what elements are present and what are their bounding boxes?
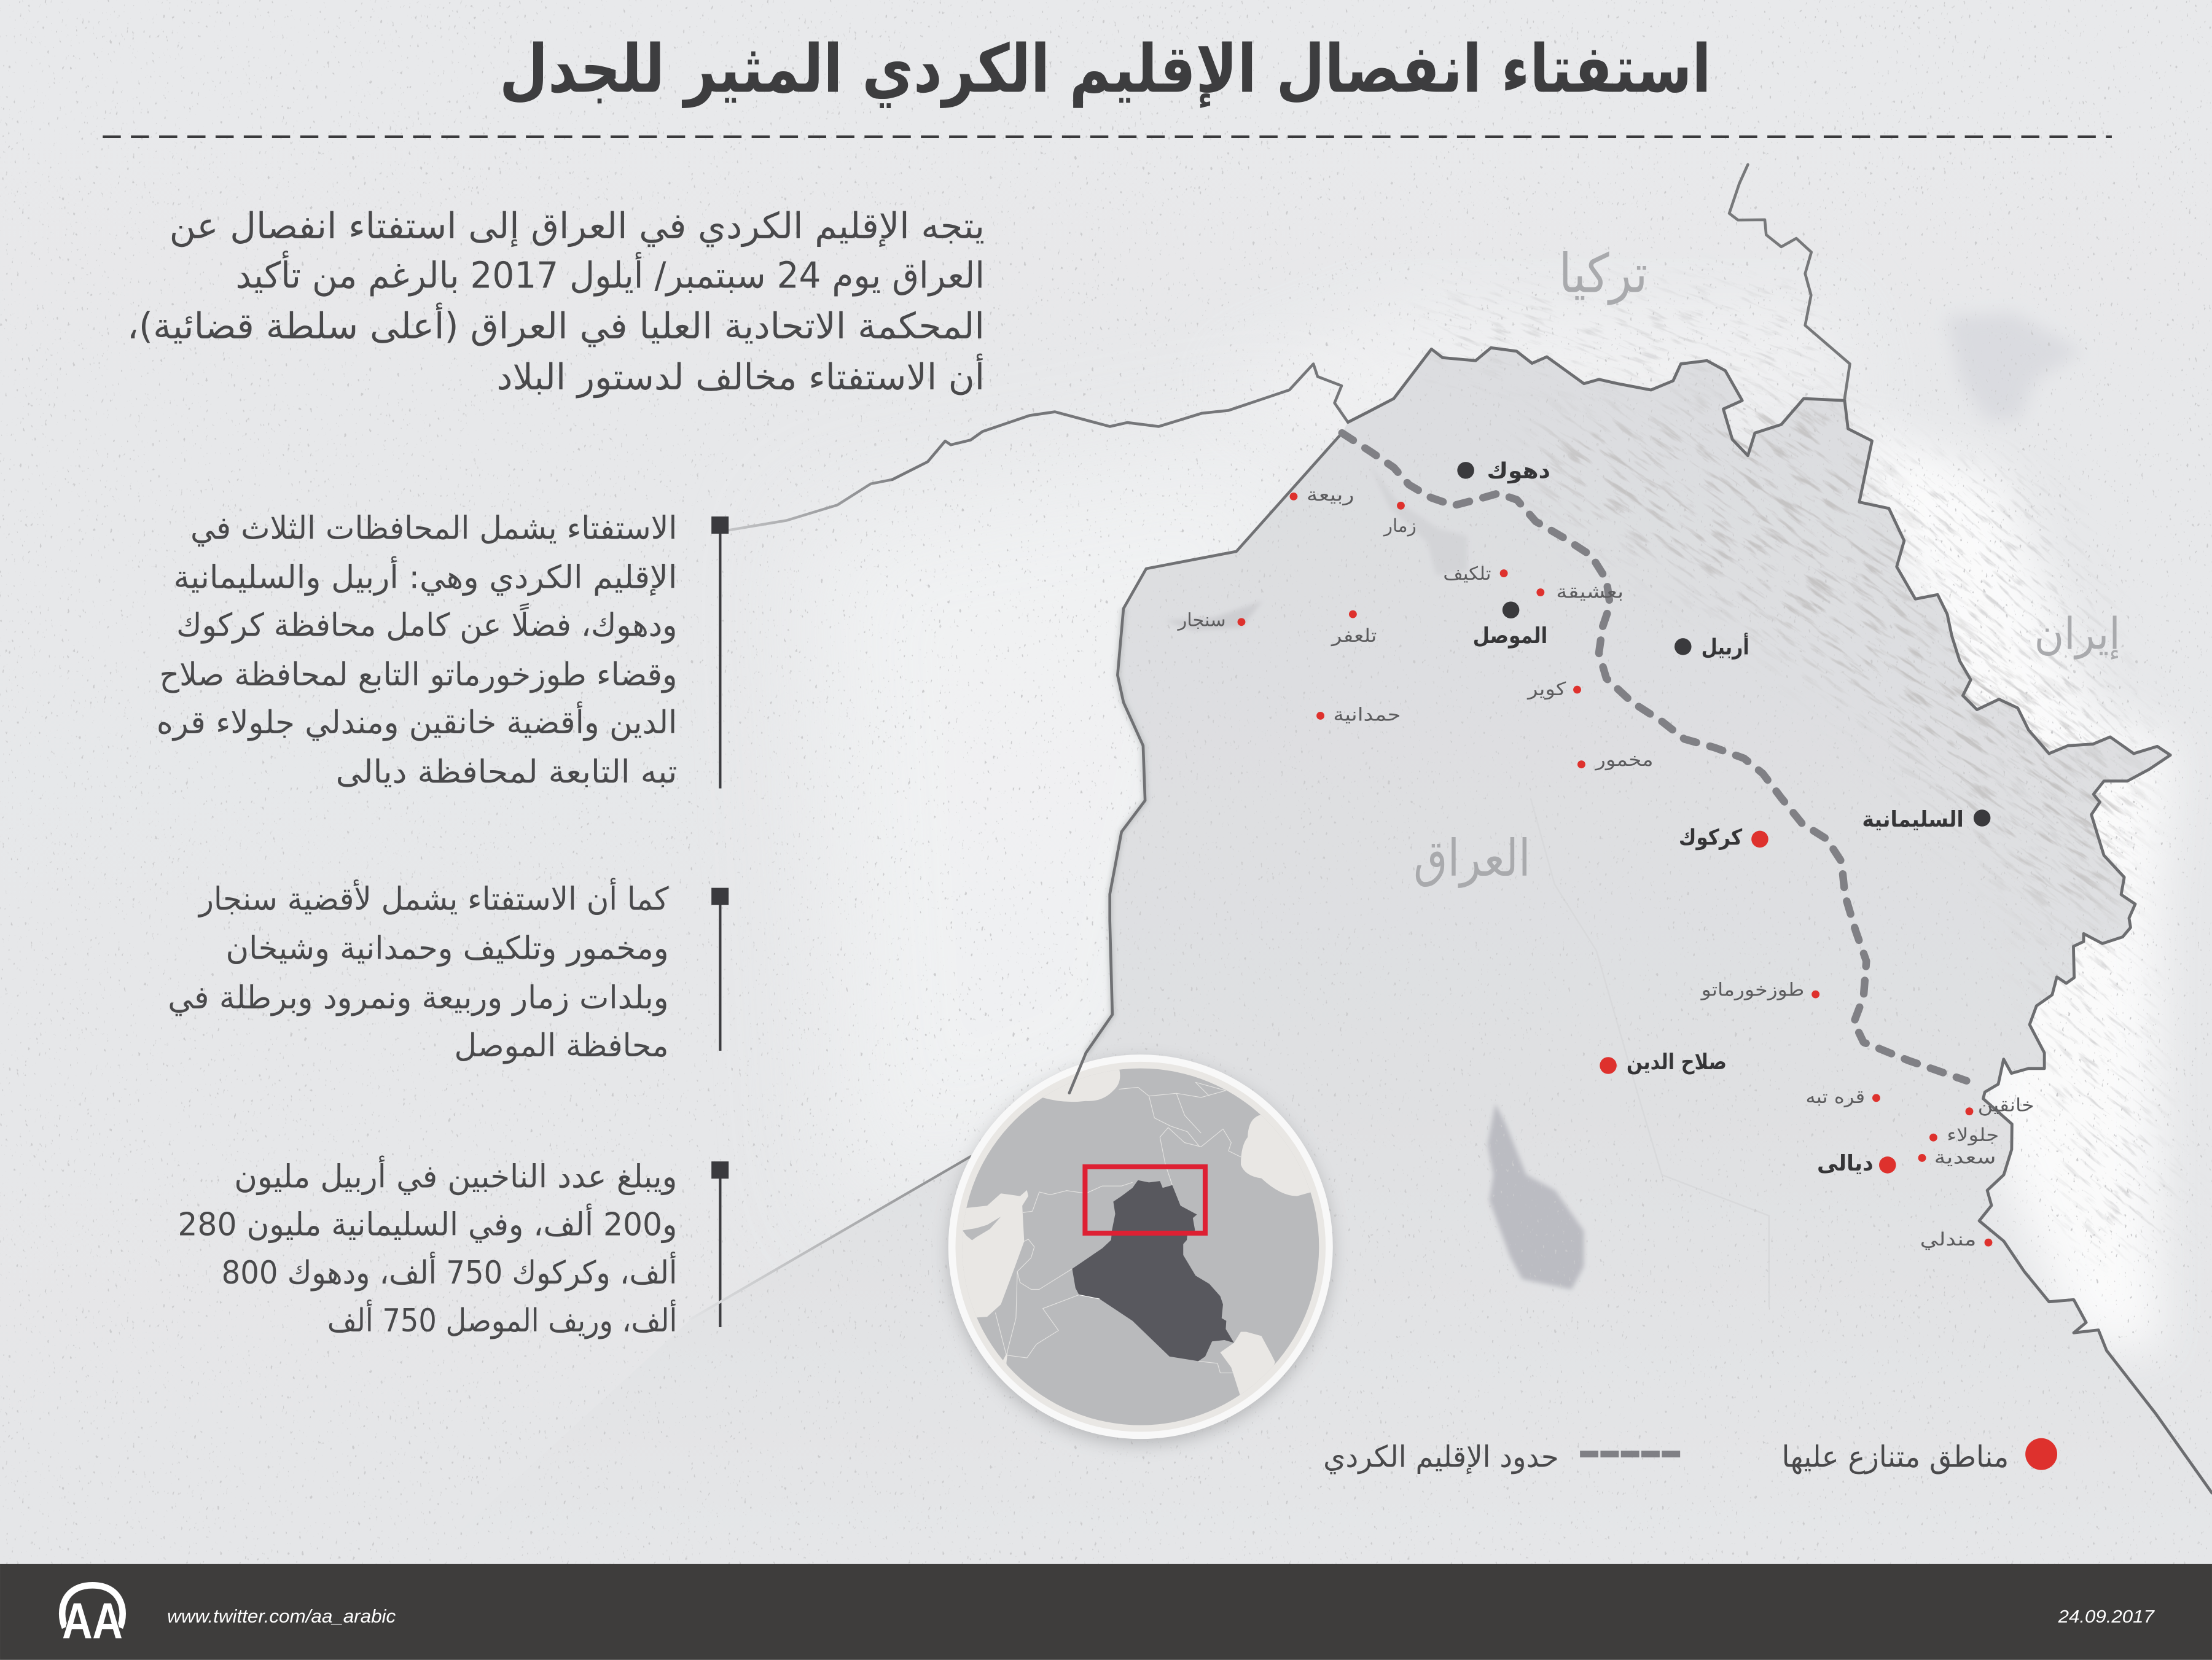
text block: districts: محافظة الموصل [455, 1027, 669, 1064]
Zummar [1383, 502, 1417, 537]
Rabia: ربيعة [1307, 484, 1354, 505]
red focus rectangle [1085, 1167, 1205, 1233]
Mandali: مندلي [1920, 1229, 1976, 1250]
Rabia [1290, 484, 1354, 505]
text block: voters: و200 ألف، وفي السليمانية مليون 280 [178, 1204, 677, 1244]
district labels [1177, 484, 2034, 1250]
text block: districts [168, 878, 669, 1064]
Khanaqin: خانقين [1978, 1095, 2034, 1116]
Iraq Iran border [1845, 400, 2212, 1493]
Sinjar ridge [1165, 601, 1262, 631]
intro text block: أن الاستفتاء مخالف لدستور البلاد [496, 353, 985, 399]
light Iranian territory [1848, 423, 2173, 1354]
globe inner ring [955, 1062, 1326, 1432]
Qara Tapa: قره تبه [1806, 1086, 1865, 1108]
Iraq silhouette [1072, 1180, 1234, 1361]
country labels: العراق [1413, 829, 1531, 888]
Caspian Sea [1241, 1104, 1349, 1196]
Jalawla: جلولاء [1947, 1124, 1999, 1146]
Zummar: زمار [1383, 515, 1417, 537]
Sulaymaniyah: السليمانية [1862, 807, 1964, 832]
intro text block: يتجه الإقليم الكردي في العراق إلى استفتاء انفصال عن [170, 205, 985, 247]
footer bar [0, 1564, 2212, 1660]
inner edge shading [1086, 609, 1145, 1053]
lake in Iran [1945, 313, 2083, 420]
Mosul [1473, 601, 1547, 649]
text block: voters: ألف، وريف الموصل 750 ألف [327, 1300, 677, 1339]
Saadiya [1918, 1147, 1996, 1169]
globe map shapes [938, 1061, 1349, 1400]
Jalawla [1929, 1124, 1999, 1146]
globe land [962, 1069, 1319, 1425]
Mosul dam lake [1369, 462, 1467, 575]
Cyprus [963, 1217, 1001, 1241]
regional border lines [995, 1082, 1241, 1373]
Mosul: الموصل [1473, 623, 1547, 649]
AA logo: AA [62, 1592, 123, 1649]
Hamdaniya [1316, 704, 1401, 726]
Saadiya: سعدية [1934, 1147, 1996, 1169]
date: 24.09.2017 [2058, 1607, 2155, 1627]
Syria border entering globe [1069, 1053, 1086, 1093]
legend: Kurdish region border: حدود الإقليم الكردي [1323, 1440, 1559, 1474]
text block: governorates: تبه التابعة لمحافظة ديالى [336, 754, 677, 791]
country borders [691, 165, 2212, 1493]
Tharthar lake [1488, 1104, 1584, 1290]
Makhmur [1577, 749, 1654, 771]
Bashiqa [1536, 582, 1624, 603]
Kuwair: كوير [1526, 679, 1566, 700]
Iranian highlands relief [1874, 453, 2173, 1253]
title: استفتاء انفصال الإقليم الكردي المثير للجدل [499, 31, 1711, 108]
Syria Turkey border fading line [728, 480, 893, 530]
Black Sea [1026, 1061, 1120, 1102]
country labels: تركيا [1559, 242, 1647, 305]
Iraq territory [423, 348, 2212, 1564]
text block: governorates: الاستفتاء يشمل المحافظات الثلاث في [190, 510, 677, 547]
legend: disputed areas: مناطق متنازع عليها [1782, 1440, 2009, 1474]
Bashiqa: بعشيقة [1556, 582, 1624, 603]
marker line 3 [711, 1161, 729, 1327]
Syria Turkey border [893, 364, 1348, 480]
globe outer ring [948, 1054, 1333, 1439]
marker line 2 [711, 888, 729, 1051]
text block: voters: ويبلغ عدد الناخبين في أربيل مليون [234, 1156, 677, 1196]
Iran Turkey border [1729, 165, 1850, 399]
text block: governorates: الدين وأقضية خانقين ومندلي جلولاء قره [157, 701, 677, 741]
Tal Afar [1331, 610, 1377, 647]
country labels [1413, 242, 2120, 888]
Turkish highlands relief [1425, 286, 1818, 389]
Mediterranean Sea [938, 1190, 1028, 1323]
Kurdish region dashed border [1342, 433, 1966, 1081]
text block: governorates: ودهوك، فضلًا عن كامل محافظة كركوك [176, 602, 677, 644]
marker line 1 [711, 516, 729, 789]
Red Sea tip [990, 1351, 1015, 1384]
Kirkuk: كركوك [1679, 825, 1742, 851]
text block: voters [178, 1156, 677, 1339]
Kuwair [1526, 679, 1581, 700]
Erbil: أربيل [1702, 633, 1749, 660]
Hamdaniya: حمدانية [1333, 704, 1401, 726]
Iraq Turkey border [1348, 348, 1845, 456]
country labels: إيران [2034, 608, 2120, 660]
map base [849, 291, 2173, 1352]
rivers [1531, 798, 1769, 1307]
text block: governorates: الإقليم الكردي وهي: أربيل والسليمانية [174, 556, 677, 596]
text block: districts: ومخمور وتلكيف وحمدانية وشيخان [225, 930, 669, 967]
intro text block: العراق يوم 24 سبتمبر/ أيلول 2017 بالرغم من تأكيد [236, 251, 985, 297]
Duhok: دهوك [1487, 459, 1550, 484]
title divider [103, 136, 2112, 138]
text block: governorates [157, 510, 677, 791]
Sinjar: سنجار [1177, 610, 1226, 631]
Salah al-Din: صلاح الدين [1627, 1050, 1727, 1075]
Mandali [1920, 1229, 1992, 1250]
intro text block: المحكمة الاتحادية العليا في العراق (أعلى سلطة قضائية)، [127, 302, 985, 348]
footer [0, 1564, 2212, 1660]
twitter address: www.twitter.com/aa_arabic [167, 1606, 396, 1627]
light Syrian territory [804, 423, 1326, 1227]
Diyala: ديالى [1817, 1151, 1874, 1176]
governorate capitals [1457, 459, 1990, 1176]
Salah al-Din [1600, 1050, 1727, 1075]
Sinjar [1177, 610, 1245, 631]
text block: voters: ألف، وكركوك 750 ألف، ودهوك 800 [222, 1252, 677, 1292]
Erbil [1675, 633, 1749, 660]
text block: districts: وبلدات زمار وربيعة ونمرود وبرطلة في [168, 980, 669, 1016]
Telkaif: تلكيف [1443, 563, 1491, 585]
globe shadow [948, 1061, 1332, 1444]
Tal Afar: تلعفر [1331, 625, 1377, 647]
legend [1323, 1438, 2057, 1474]
Makhmur: مخمور [1594, 749, 1654, 771]
Tuz Khurmatu: طوزخورماتو [1700, 979, 1804, 1000]
Iraq Syria border [1086, 433, 1342, 1053]
Duhok [1457, 459, 1550, 484]
intro text block [127, 205, 985, 399]
Persian Gulf [1221, 1332, 1275, 1400]
Syria Jordan faint border [691, 1156, 971, 1319]
light Turkish border zone [1213, 303, 1862, 451]
mountain relief [1536, 382, 2148, 918]
locator globe [938, 1054, 1349, 1444]
text block: districts: كما أن الاستفتاء يشمل لأقضية سنجار [197, 878, 669, 918]
text block: governorates: وقضاء طوزخورماتو التابع لمحافظة صلاح [160, 657, 677, 693]
